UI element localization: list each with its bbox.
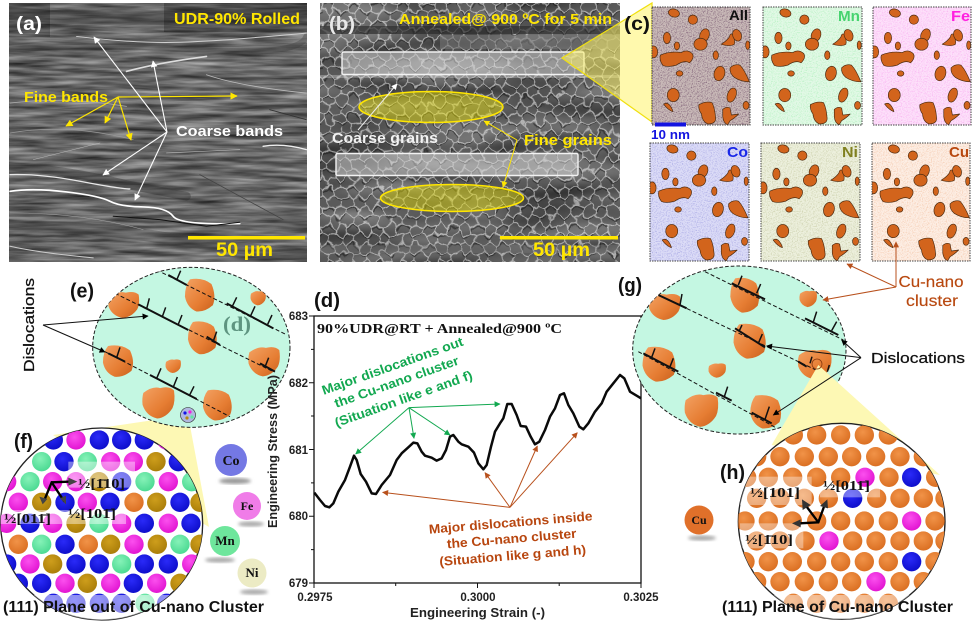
callout arrows [823, 242, 896, 300]
panel label c: (c) [624, 14, 650, 35]
caption f: (111) Plane out of Cu-nano Cluster [3, 599, 264, 616]
inset marker g [812, 359, 822, 369]
fine grains arrows [484, 121, 517, 187]
brown annotation: Major dislocations inside [428, 508, 593, 537]
y axis labels: 679 [289, 578, 308, 590]
green annotation: the Cu-nano cluster [332, 353, 461, 411]
schematic f: (111) plane out of cluster [0, 428, 210, 622]
fine grains ellipse lower [380, 184, 524, 212]
legend Mn: Mn [215, 533, 236, 548]
caption h: (111) Plane of Cu-nano Cluster [722, 599, 953, 616]
atoms circle f [1, 428, 203, 620]
green annotation: (Situation like e and f) [333, 367, 474, 430]
small inset dot e [180, 408, 196, 422]
legend Fe [233, 492, 264, 527]
scale text b: 50 µm [533, 240, 590, 261]
chart subtitle: 90%UDR@RT + Annealed@900 ºC [317, 322, 562, 337]
coarse grains leader [358, 84, 397, 130]
coarse grains label: Coarse grains [332, 131, 438, 147]
green annotation [320, 334, 474, 430]
panel label a: (a) [16, 14, 42, 35]
fine bands label: Fine bands [24, 89, 108, 106]
y axis labels: 683 [289, 311, 308, 323]
schematic e: dislocations out of cluster [93, 267, 290, 427]
callout text line 2: cluster [906, 293, 959, 310]
title backdrop a [164, 3, 307, 32]
scale bar a [188, 236, 305, 240]
map: Cu: Cu [949, 144, 969, 161]
coarse grain band lower [336, 154, 578, 176]
chart d: engineering stress-strain [266, 290, 659, 620]
map: All [650, 7, 750, 125]
clusters g [643, 278, 832, 429]
x axis labels: 0.3025 [623, 592, 659, 604]
y axis title: Engineering Stress (MPa) [266, 375, 280, 528]
yellow wedge g to h [772, 365, 940, 475]
panel label b: (b) [329, 14, 355, 35]
legend Fe: Fe [241, 499, 254, 513]
x axis labels: 0.3000 [460, 592, 496, 604]
panel title a: UDR-90% Rolled [174, 11, 300, 28]
label backdrops h [737, 477, 947, 622]
coarse bands label: Coarse bands [176, 123, 283, 140]
atoms h [735, 425, 955, 622]
green annotation: Major dislocations out [320, 334, 466, 398]
green arrows [356, 404, 500, 454]
scale text a: 50 µm [216, 240, 273, 261]
label h: (h) [720, 462, 745, 484]
scale text c: 10 nm [651, 128, 690, 142]
legend Ni [238, 558, 268, 595]
direction label h3: ½[1̄10] [745, 533, 793, 548]
map: Cu [870, 143, 970, 261]
atoms f [0, 430, 210, 622]
dislocation lines e [105, 270, 286, 417]
atoms circle h [738, 423, 945, 619]
map: All: All [729, 7, 748, 23]
legend Cu: Cu [691, 513, 707, 527]
dislocation lines g [638, 272, 843, 430]
brown arrows [383, 433, 577, 507]
y axis labels [289, 311, 309, 590]
panel c: elemental maps [624, 7, 971, 261]
direction label f3: ½[011̄] [4, 512, 51, 527]
panel a: rolled SEM micrograph [9, 3, 307, 262]
direction arrows f [44, 482, 68, 501]
direction label f2: ½[101̄] [68, 507, 116, 522]
scale bar b [500, 236, 618, 240]
direction arrow tips h [792, 499, 828, 527]
legend Ni: Ni [246, 565, 259, 580]
map: Fe [871, 7, 971, 125]
fine band arrows [66, 96, 237, 140]
brown annotation: the Cu-nano cluster [446, 526, 577, 551]
stress curve [314, 375, 641, 507]
legend: atoms [205, 444, 268, 595]
SEM image b [320, 3, 620, 262]
callout: Cu-nano cluster [823, 242, 964, 310]
legend Co [215, 444, 251, 484]
SEM image a [9, 3, 307, 262]
direction arrow tips f [39, 478, 77, 504]
ghost label d in circle e: (d) [223, 312, 251, 336]
zoom wedge from b to c [562, 3, 652, 122]
dislocations label right: Dislocations [871, 350, 965, 367]
map: Fe: Fe [951, 8, 970, 25]
schematic g and h group [633, 266, 955, 622]
fine grains label: Fine grains [524, 132, 612, 149]
label backdrop a [9, 3, 50, 37]
brown annotation [428, 508, 593, 569]
map: Ni: Ni [842, 144, 858, 161]
x axis labels [297, 592, 659, 604]
dislocation arrows right [767, 340, 861, 415]
direction label f1: ½[1̄10] [78, 477, 125, 492]
label backdrops f [0, 462, 203, 622]
matrix circle e [93, 267, 290, 427]
x axis labels: 0.2975 [297, 592, 333, 604]
label g: (g) [618, 275, 642, 297]
label e: (e) [70, 280, 94, 302]
matrix circle g [633, 266, 846, 434]
direction label h2: ½[011̄] [823, 479, 870, 494]
dislocations label left: Dislocations [21, 278, 38, 372]
fine grains ellipse upper [359, 92, 503, 122]
scale bar c [655, 122, 686, 126]
yellow wedge e to f [53, 415, 209, 527]
legend Co: Co [222, 454, 240, 469]
map: Mn [761, 7, 862, 125]
y axis labels: 682 [289, 378, 308, 390]
panel title b: Annealed@ 900 ºC for 5 min [399, 11, 612, 28]
panel b: annealed SEM micrograph [310, 0, 635, 275]
y axis labels: 681 [289, 445, 309, 457]
legend Mn [205, 526, 240, 563]
clusters e [103, 279, 280, 420]
map: Mn: Mn [838, 8, 860, 25]
direction arrows h [800, 507, 824, 523]
legend Cu [684, 506, 716, 541]
brown annotation: (Situation like g and h) [439, 542, 586, 569]
map: Ni [759, 143, 860, 261]
plot frame [314, 316, 641, 583]
y axis labels: 680 [289, 511, 308, 523]
panel label d: (d) [314, 290, 340, 312]
direction label h1: ½[101] [750, 486, 800, 501]
axis ticks [309, 316, 641, 588]
coarse band arrows [94, 37, 167, 200]
map: Co: Co [727, 144, 748, 161]
label f: (f) [14, 431, 33, 453]
x axis title: Engineering Strain (-) [410, 606, 545, 620]
callout text: Cu-nano [898, 274, 964, 291]
coarse grain band upper [342, 52, 584, 74]
dislocation arrows left [43, 316, 148, 352]
map: Co [648, 143, 749, 261]
